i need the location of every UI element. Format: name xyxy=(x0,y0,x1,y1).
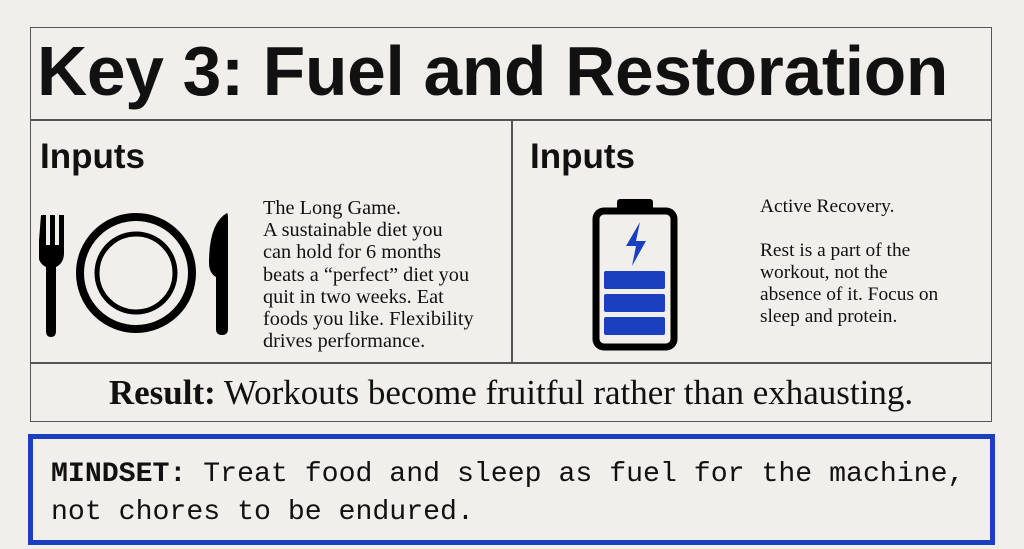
text: active recovery: Active Recovery. xyxy=(760,196,894,217)
heading: inputs left: Inputs xyxy=(40,137,145,176)
text: the long game: The Long Game. xyxy=(263,197,401,219)
title row divider xyxy=(30,119,992,120)
callout: mindset xyxy=(28,434,995,545)
main panel frame xyxy=(30,27,992,422)
panel: right inputs xyxy=(530,137,938,350)
heading: inputs right: Inputs xyxy=(530,137,635,176)
text: the long game: drives performance. xyxy=(263,330,425,352)
column divider xyxy=(511,120,512,363)
text: active recovery: workout, not the xyxy=(760,262,888,283)
text: the long game: quit in two weeks. Eat xyxy=(263,286,444,308)
callout: mindset: MINDSET: Treat food and sleep as fuel for the machine, xyxy=(51,459,964,490)
text: the long game: foods you like. Flexibility xyxy=(263,308,474,330)
result row divider xyxy=(30,362,992,364)
text: active recovery xyxy=(760,196,938,327)
callout: mindset: not chores to be endured. xyxy=(51,497,474,528)
text: active recovery: sleep and protein. xyxy=(760,306,897,327)
result: Result: Workouts become fruitful rather than exhausting. xyxy=(109,373,913,412)
title: Key 3: Fuel and Restoration xyxy=(37,32,948,110)
text: active recovery: absence of it. Focus on xyxy=(760,284,938,305)
text: the long game: beats a “perfect” diet you xyxy=(263,264,469,286)
icon: plate with fork and knife xyxy=(39,213,228,337)
text: the long game: can hold for 6 months xyxy=(263,241,441,263)
text: the long game xyxy=(263,197,474,352)
icon: battery xyxy=(592,199,678,350)
text: active recovery: Rest is a part of the xyxy=(760,240,910,261)
text: the long game: A sustainable diet you xyxy=(263,219,443,241)
panel: left inputs xyxy=(39,137,474,352)
